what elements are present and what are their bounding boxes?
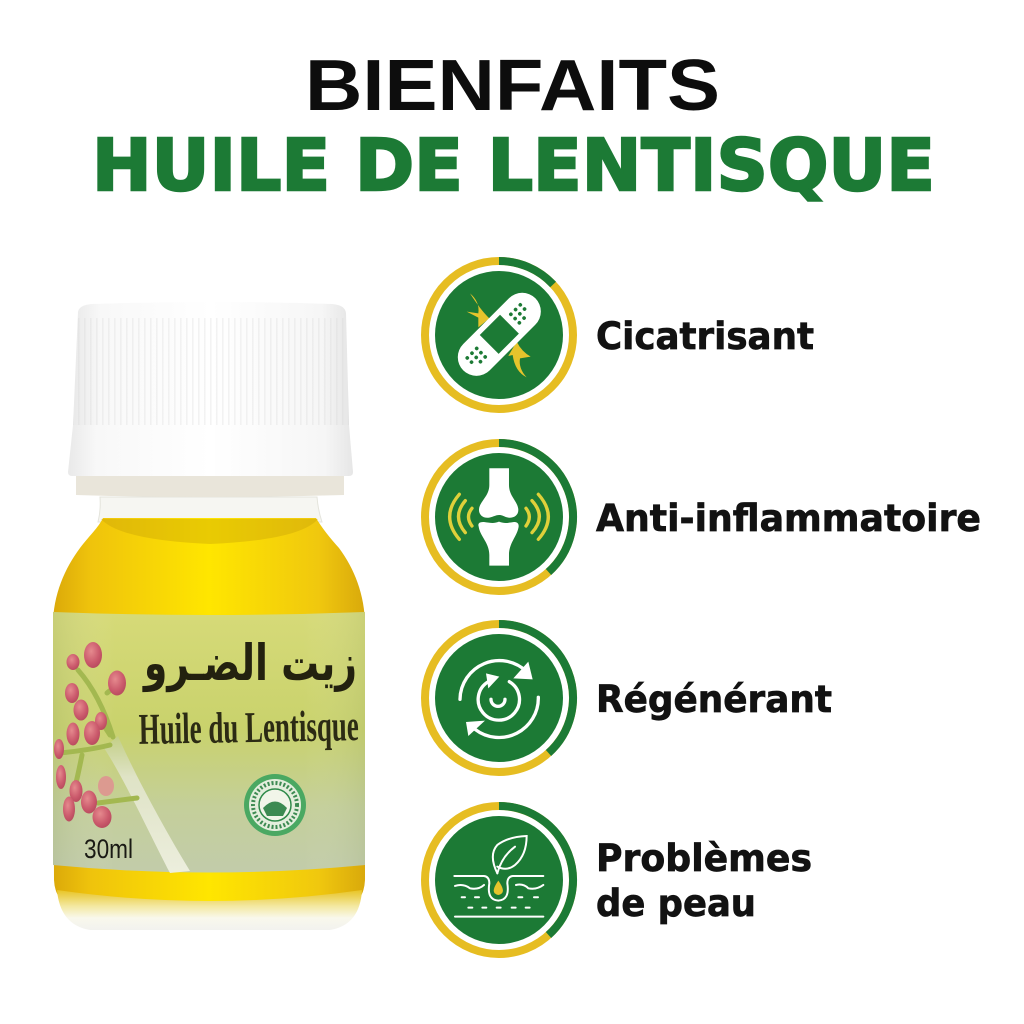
label [596,837,812,925]
volume: 30ml [84,834,133,864]
latin name: Huile du Lentisque [138,701,359,754]
seal [244,774,306,836]
icon: renewal arrows [425,624,573,772]
label: Problèmes [596,837,812,880]
benefit 3: regenerant [425,624,832,772]
label: Régénérant [596,678,832,721]
benefit 1: cicatrisant [425,261,814,409]
bottle label [53,612,365,873]
bottle cap [68,302,353,497]
benefit 2: anti-inflammatoire [425,443,981,591]
product bottle [53,302,365,930]
oil surface [101,519,318,544]
arabic name: زيت الضـرو [142,635,357,692]
ribbed cap top [73,302,349,426]
title [92,46,935,207]
cap band [68,425,353,476]
icon: joint [425,443,573,591]
heading: huile de lentisque: HUILE DE LENTISQUE [92,124,935,207]
oil body [53,518,365,905]
icon: skin and leaf [425,806,573,954]
benefit 4: problemes de peau [425,806,812,954]
label: Cicatrisant [596,315,814,358]
label: Anti-inflammatoire [596,497,981,540]
glass base [57,890,362,930]
berries [54,642,126,828]
lentisk branch [54,642,190,873]
label: de peau [596,882,756,925]
heading: BIENFAITS: BIENFAITS [305,46,720,126]
icon: bandage [425,261,573,409]
cap collar [76,476,344,497]
glass neck [98,497,322,522]
